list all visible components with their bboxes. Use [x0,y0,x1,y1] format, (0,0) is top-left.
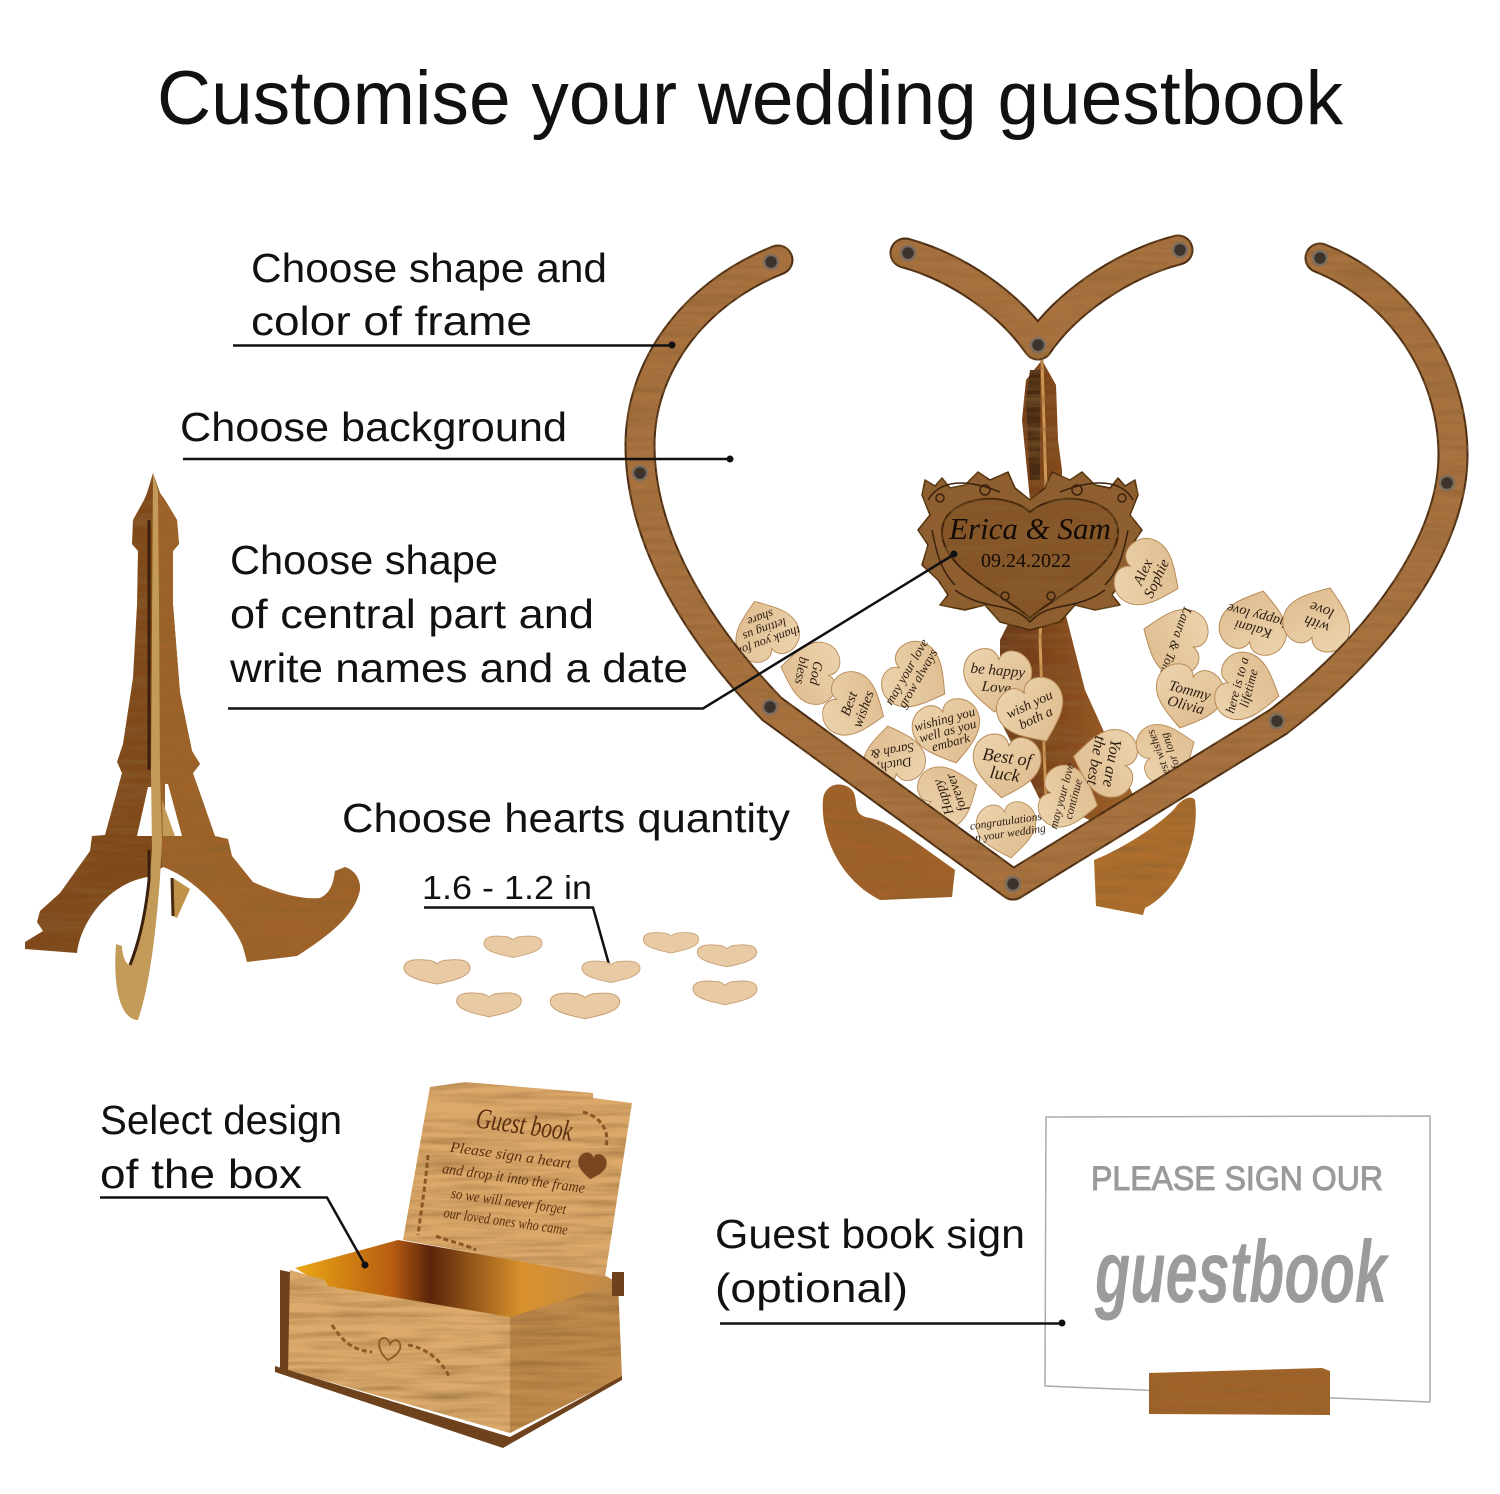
icon: wooden box [275,1082,632,1448]
message hearts: wishes [850,688,878,730]
message hearts: Olivia [1165,693,1206,718]
box lid: Guest book [474,1102,575,1148]
label: guest book sign [715,1211,1066,1326]
message hearts: Tommy [1167,678,1213,705]
label: guest book sign: (optional) [715,1265,908,1311]
label: background [180,404,734,462]
message hearts: Dutch, [876,754,914,774]
icon: heart frame stand with hearts [633,243,1454,915]
message hearts: Best of [981,744,1036,771]
message hearts: embark [930,730,972,754]
message hearts: continue [1061,777,1085,821]
message hearts: here is to a [1222,655,1252,715]
message hearts: Love [980,679,1012,697]
message hearts: the best [1083,735,1108,787]
message hearts: bless [792,656,812,685]
label: central part: of central part and [230,591,594,637]
message hearts: grow always [895,646,940,710]
wooden sign base [1149,1368,1330,1415]
label: central part: write names and a date [229,645,688,691]
stand feet [823,785,1196,915]
message hearts: You are [1099,738,1124,788]
box front [280,1270,510,1433]
message hearts: wish you [1004,688,1055,722]
message hearts: well as you [917,716,978,745]
box right side [510,1283,622,1433]
message hearts: with [1302,612,1332,636]
box base rim [275,1366,622,1448]
title: Customise your wedding guestbook [157,56,1344,141]
message hearts: both a [1017,705,1055,733]
message hearts: best wishes [1144,727,1175,782]
loose wooden hearts [404,932,757,1019]
message hearts: Sarah & [869,740,915,761]
name plaque: 09.24.2022 [981,550,1071,572]
label: frame [233,245,676,348]
label: central part [228,537,958,708]
label: hearts quantity: Choose hearts quantity [342,795,791,841]
box interior [295,1240,618,1320]
box lid: Please sign a heart [448,1139,573,1173]
panel: acrylic guestbook sign: PLEASE SIGN OUR [1091,1160,1383,1198]
message hearts: Sophie [1141,557,1173,601]
box pointer line [100,1198,368,1268]
box lid: so we will never forget [450,1186,568,1218]
label: box: of the box [100,1151,303,1197]
label: frame: Choose shape and [251,245,607,291]
message hearts: God [807,660,826,686]
message hearts: forever [942,771,970,813]
label: heart size: 1.6 - 1.2 in [422,869,592,906]
label: guest book sign: Guest book sign [715,1211,1025,1257]
message hearts: Alex [1130,557,1157,589]
message hearts: may your love [1046,761,1077,831]
icon: Eiffel tower stand [25,473,360,1020]
message hearts: Laura & Tom [1157,604,1196,676]
message hearts: love [1307,598,1337,621]
heart-shaped wooden frame [640,250,1453,885]
message hearts [723,531,1362,863]
label: central part: Choose shape [230,537,498,583]
message hearts: on your wedding [969,823,1047,845]
panel: acrylic guestbook sign [1045,1116,1430,1415]
message hearts: letting us [741,615,789,644]
name plaque [918,472,1142,630]
message hearts: luck [989,762,1022,786]
label: background: Choose background [180,404,567,450]
label: heart size [422,869,614,972]
frame screws [633,243,1454,891]
message hearts: for long [1158,731,1183,771]
label: frame: color of frame [251,298,532,344]
message hearts: thank you for [735,623,802,659]
message hearts: happy love [1226,600,1288,630]
box lid: and drop it into the frame [441,1161,586,1197]
central tower [1000,360,1140,830]
message hearts: share [745,606,776,629]
message hearts: Best [838,689,862,718]
label: box [100,1097,342,1197]
label: box: Select design [100,1097,342,1143]
message hearts: may your love [881,636,931,707]
message hearts: Kalani [1233,616,1275,641]
name plaque: Erica & Sam [948,511,1111,546]
message hearts: wishing you [912,704,977,734]
message hearts: lifetime [1236,667,1261,709]
box lid: our loved ones who came [443,1205,569,1239]
message hearts: congratulations [969,811,1043,833]
message hearts: be happy [970,661,1026,681]
box lid [403,1082,632,1277]
message hearts: Happy [929,777,957,818]
